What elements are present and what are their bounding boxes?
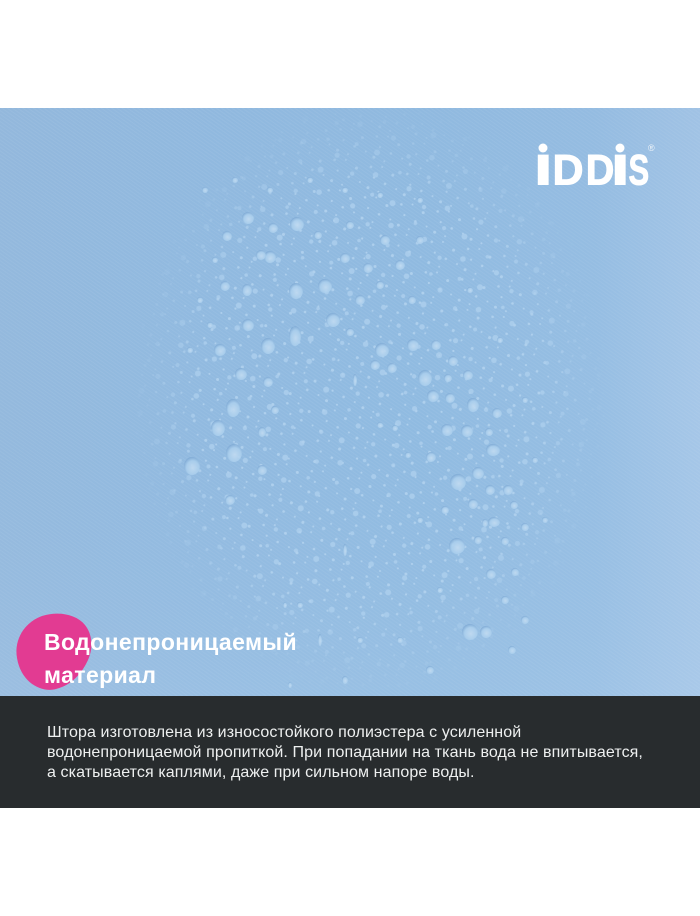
heading: Водонепроницаемый — [44, 629, 297, 655]
heading: материал — [44, 662, 156, 688]
heading — [44, 629, 297, 688]
logo: IDDIS — [534, 143, 655, 192]
text block: description — [47, 724, 643, 780]
logo: IDDIS: ® — [648, 143, 655, 153]
photo: water droplets on blue fabric — [0, 108, 700, 696]
panel: description — [0, 696, 700, 808]
text block: description: а скатывается каплями, даже при сильном напоре воды. — [47, 764, 475, 780]
text block: description: водонепроницаемой пропиткой. При попадании на ткань вода не впитывается, — [47, 744, 643, 760]
pink blob accent — [16, 614, 92, 690]
text block: description: Штора изготовлена из износостойкого полиэстера с усиленной — [47, 724, 521, 740]
